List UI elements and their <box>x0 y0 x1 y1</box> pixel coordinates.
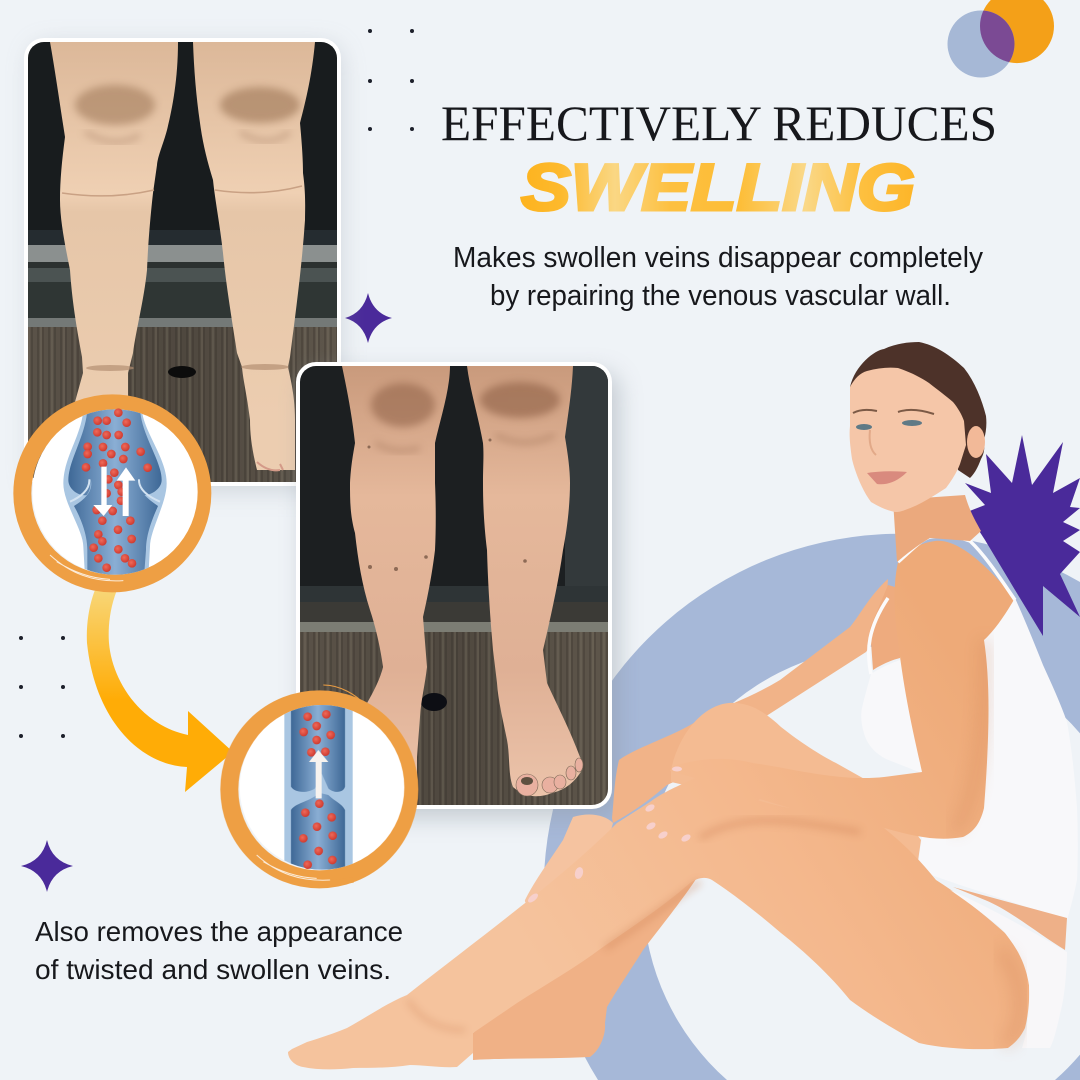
flow arrow <box>309 750 328 798</box>
fingernails <box>526 766 692 904</box>
subheading text: Makes swollen veins disappear completely <box>453 242 983 274</box>
brush ring <box>22 400 202 585</box>
vein circle: after <box>229 685 409 883</box>
figure: seated woman <box>288 342 1078 1069</box>
heading: EFFECTIVELY REDUCES <box>441 95 997 151</box>
near arm and hand <box>643 541 1015 842</box>
background ring <box>544 534 1080 1080</box>
dot grid top <box>368 29 414 131</box>
decorative circles top right <box>948 0 1054 78</box>
bottom text <box>35 916 403 985</box>
icon: star upper <box>345 293 392 343</box>
vein circle: before <box>22 400 202 585</box>
arrow <box>87 590 233 792</box>
bottom text: Also removes the appearance <box>35 916 403 947</box>
waist skin <box>953 887 1067 950</box>
nose shadow <box>870 430 876 455</box>
main leg <box>288 793 1029 1069</box>
far hand <box>525 815 613 904</box>
ear <box>967 426 985 458</box>
vein illustration <box>284 700 353 877</box>
face <box>850 368 966 512</box>
heading <box>441 95 997 224</box>
white tank top <box>861 598 1078 920</box>
brush ring <box>229 685 409 883</box>
limb shadows <box>408 640 1021 1045</box>
subheading text <box>453 242 983 312</box>
far arm <box>612 579 888 823</box>
icon: starburst <box>965 435 1080 636</box>
vein illustration <box>63 407 167 577</box>
tank straps <box>869 536 1015 674</box>
bottom text: of twisted and swollen veins. <box>35 954 391 985</box>
hair <box>850 342 986 478</box>
neck <box>893 495 981 562</box>
panties <box>950 890 1067 1048</box>
red blood cells <box>299 710 337 869</box>
mouth <box>867 471 907 484</box>
far lower leg and foot <box>473 865 705 1060</box>
chest skin <box>870 585 905 670</box>
dot grid left <box>19 636 65 738</box>
icon: star lower <box>21 840 73 892</box>
red blood cells <box>82 408 152 572</box>
eyes <box>853 410 934 430</box>
subheading text: by repairing the venous vascular wall. <box>490 280 951 312</box>
heading: SWELLING <box>521 150 915 224</box>
flow arrows <box>93 467 135 516</box>
photo: after legs <box>296 362 619 818</box>
raised leg <box>671 703 921 868</box>
photo: before legs <box>24 38 342 492</box>
